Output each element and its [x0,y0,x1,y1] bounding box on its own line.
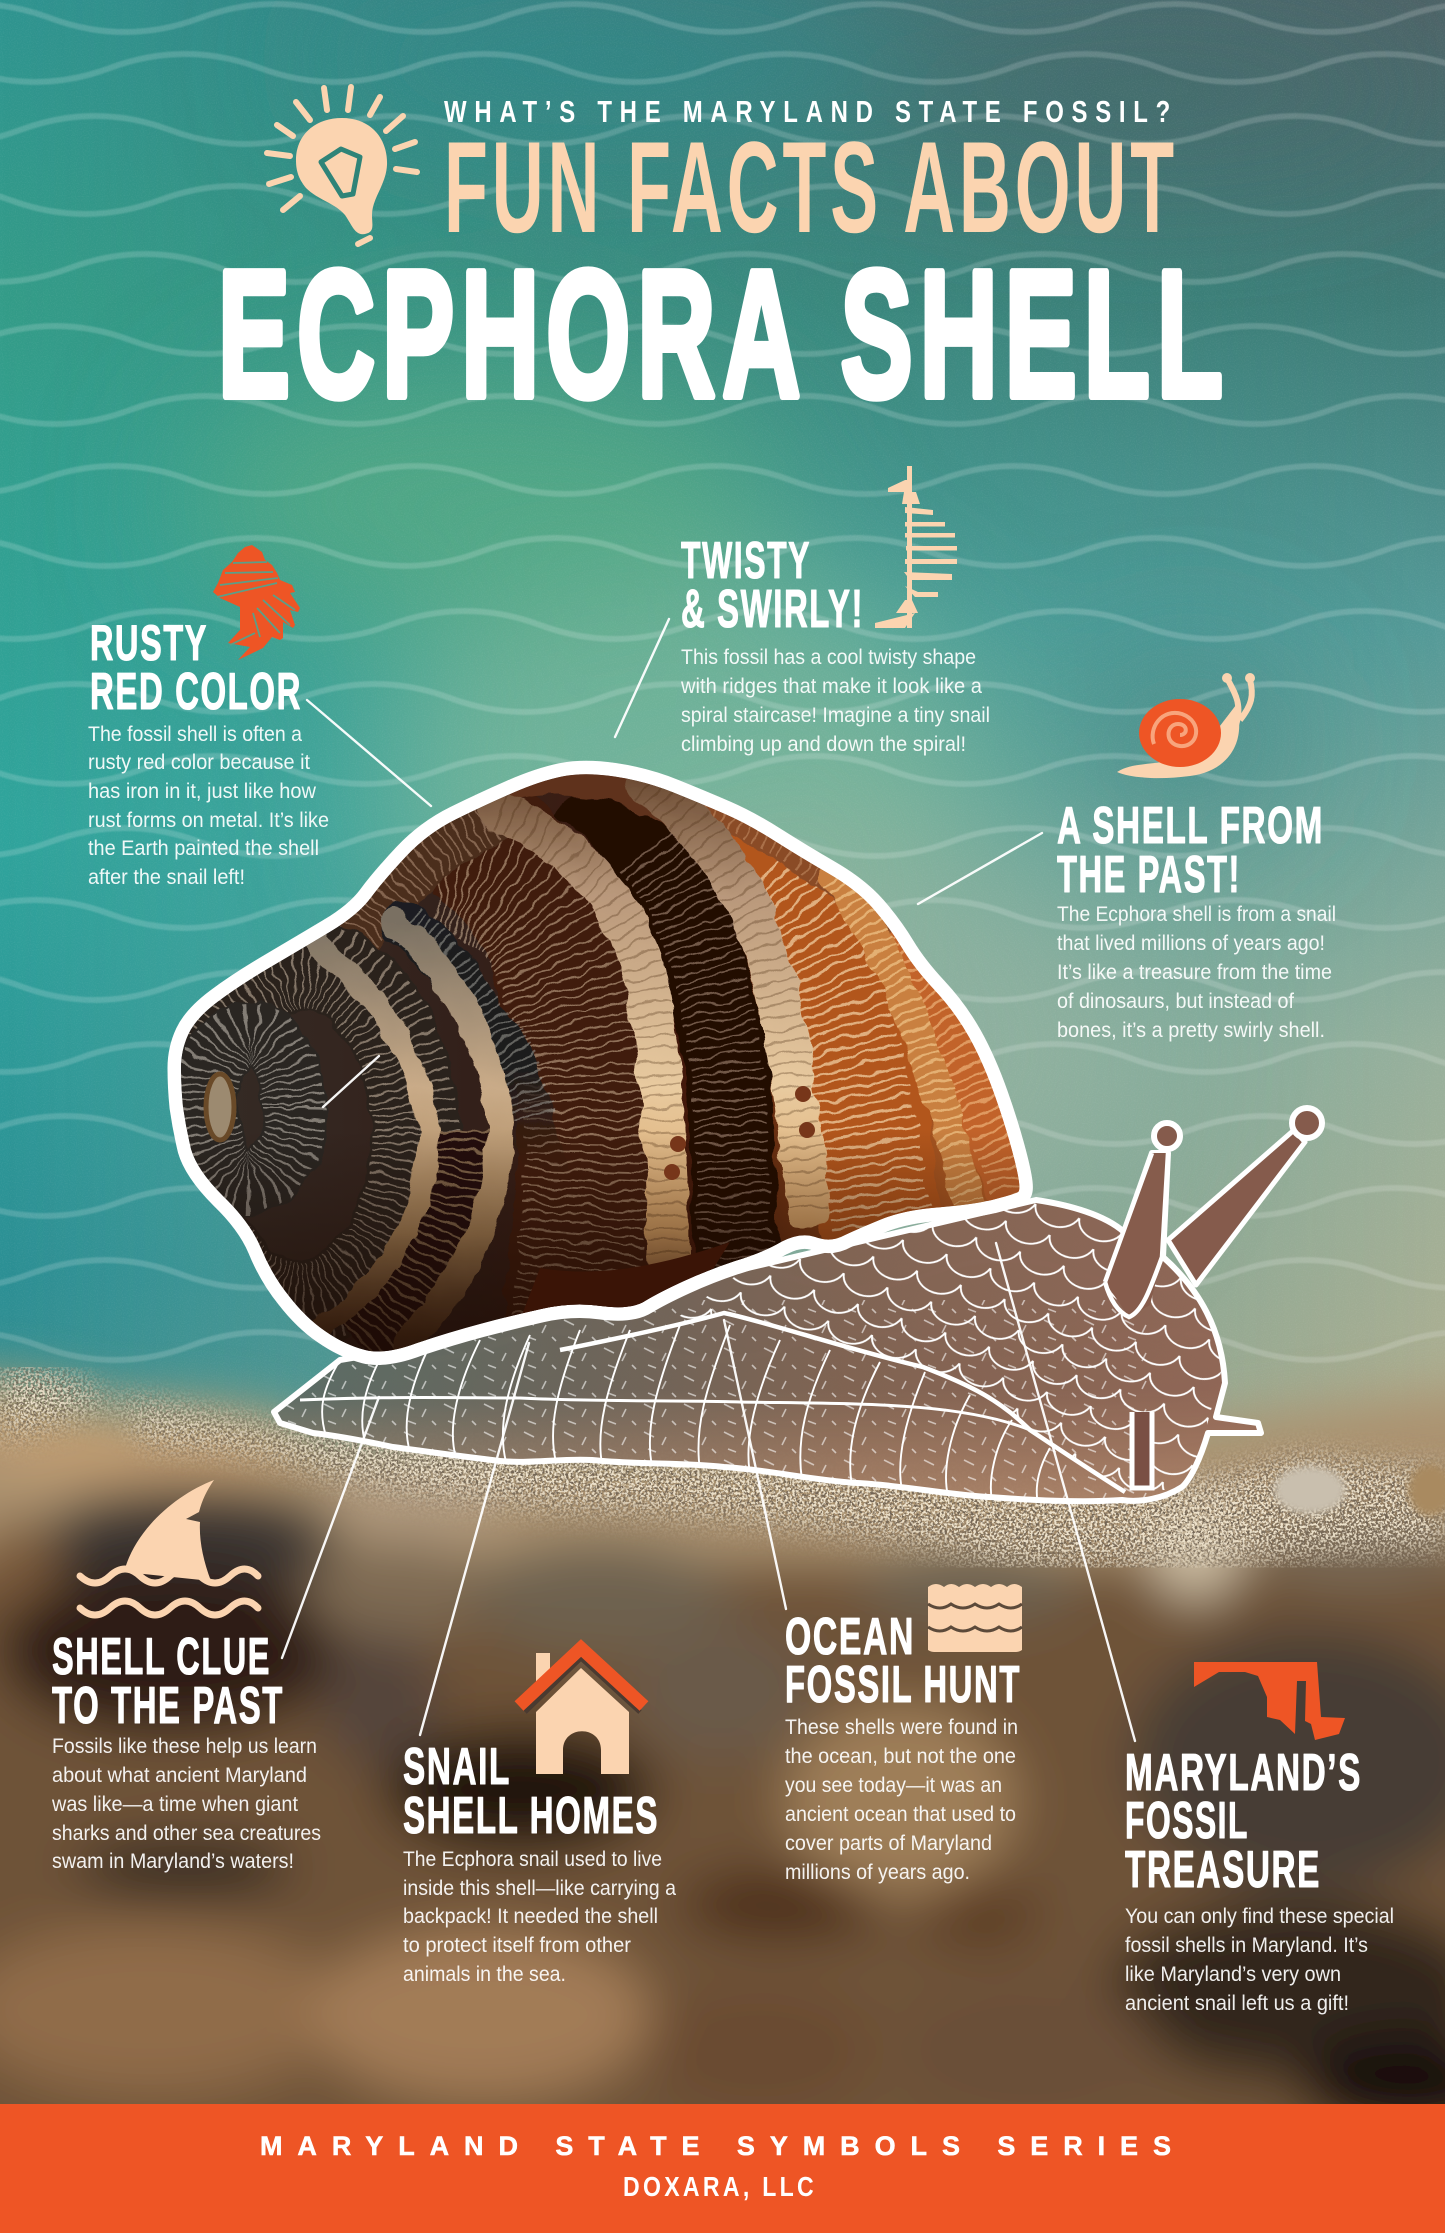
pebbles [1274,1464,1445,1516]
body text: with ridges that make it look like a [680,675,982,698]
lower shadow [170,1130,1030,1360]
body text: to protect itself from other [403,1934,631,1957]
body text: It’s like a treasure from the time [1057,961,1332,984]
icon: small snail [1117,673,1255,778]
body text: the Earth painted the shell [88,837,319,860]
body text: bones, it’s a pretty swirly shell. [1057,1019,1325,1042]
callout: shell clue to the past [51,1480,321,1873]
icon: light bulb [267,87,417,244]
heading: SHELL HOMES [403,1787,659,1845]
body text: Fossils like these help us learn [52,1735,317,1758]
body text: was like—a time when giant [51,1793,298,1816]
body text [785,1716,1018,1884]
heading: FOSSIL [1125,1792,1249,1850]
body text: that lived millions of years ago! [1057,932,1325,955]
heading: OCEAN [785,1608,915,1666]
foot mid line [300,1398,1030,1430]
callout: ocean fossil hunt [785,1584,1022,1884]
callout: twisty and swirly [680,466,990,756]
publisher: DOXARA, LLC [623,2171,817,2202]
body text [680,646,990,756]
decorative waves [0,4,1445,1360]
heading: TWISTY [681,532,811,590]
heading [403,1738,659,1845]
icon: spiral staircase [875,466,957,628]
callout: rusty red color [88,545,329,889]
shell white sticker border [181,774,1019,1351]
body text: fossil shells in Maryland. It’s [1125,1934,1368,1957]
heading: TO THE PAST [52,1677,284,1735]
heading [90,615,302,721]
large striped whorl between ribs 2 and 3 [460,830,587,1340]
body text: animals in the sea. [403,1963,566,1986]
body text [1057,903,1336,1042]
body text [403,1848,676,1986]
shell body [170,773,1040,1360]
body text: swam in Maryland’s waters! [52,1850,294,1873]
heading [1125,1744,1362,1899]
body text: cover parts of Maryland [785,1832,992,1855]
rib pits [664,1086,815,1180]
heading: SNAIL [403,1738,511,1796]
body text: ancient snail left us a gift! [1125,1992,1349,2015]
aperture [520,1242,730,1320]
heading: RUSTY [90,615,208,671]
dark whorl between ribs 3 and 4 [580,780,735,1320]
leader lines [282,619,1135,1741]
mouth stem [1132,1412,1152,1488]
heading: & SWIRLY! [681,579,864,639]
heading: TREASURE [1125,1841,1321,1899]
heading: FOSSIL HUNT [785,1656,1021,1714]
icon: stacked waves [928,1584,1022,1652]
heading [681,532,864,639]
body text: the ocean, but not the one [785,1745,1016,1768]
body text: of dinosaurs, but instead of [1057,990,1294,1013]
body text: inside this shell—like carrying a [403,1877,676,1900]
body text [51,1735,321,1873]
body text: after the snail left! [88,866,245,889]
blurred sand foreground [0,1372,1445,2170]
body text: The Ecphora shell is from a snail [1057,903,1336,926]
series label: MARYLAND STATE SYMBOLS SERIES [260,2131,1171,2161]
snail body illustration [270,1108,1322,1510]
callout: a shell from the past [1057,673,1336,1042]
heading [52,1628,284,1735]
callout: snail shell homes [403,1648,676,1986]
body text: has iron in it, just like how [88,780,317,803]
heading [785,1608,1021,1714]
body text: rust forms on metal. It’s like [88,809,329,832]
body outline [274,1153,1261,1501]
body text: climbing up and down the spiral! [681,733,966,756]
body text: This fossil has a cool twisty shape [681,646,976,669]
body text: you see today—it was an [785,1774,1002,1797]
grainy sand texture [0,1367,1445,1567]
body silhouette [274,1153,1261,1501]
heading: RED COLOR [90,663,302,721]
dark teal-black band [405,925,545,1170]
callout: maryland's fossil treasure [1125,1662,1394,2015]
icon: Maryland state map [1194,1662,1345,1740]
title block [218,87,1230,435]
middle whorl stripes [185,965,415,1305]
body text [1125,1905,1394,2015]
body text: spiral staircase! Imagine a tiny snail [681,704,990,727]
apex disc [206,1074,234,1140]
heading: SHELL CLUE [52,1628,271,1686]
body text: You can only find these special [1125,1905,1394,1928]
icon: orange conch shell [213,545,300,660]
body text: about what ancient Maryland [52,1764,307,1787]
mantle dividing line [560,1313,1125,1492]
grain overlay [0,0,1445,1420]
ribs [318,945,428,1328]
apex whorl [205,1034,295,1182]
footer band [0,2104,1445,2233]
body text: rusty red color because it [88,751,310,774]
body text: sharks and other sea creatures [52,1822,321,1845]
icon: shark fin over waves [80,1480,258,1615]
kicker text: WHAT’S THE MARYLAND STATE FOSSIL? [444,94,1178,129]
whorl between ribs 4 and 5 [740,800,885,1260]
back eye stalk [1168,1108,1322,1285]
body text: ancient ocean that used to [785,1803,1016,1826]
front eye stalk [1105,1123,1180,1317]
heading [1057,797,1324,904]
icon: house [519,1648,644,1774]
body text: backpack! It needed the shell [403,1905,658,1928]
body text: These shells were found in [785,1716,1018,1739]
body text: millions of years ago. [785,1861,970,1884]
body scales and ridges [286,1203,1221,1498]
heading: THE PAST! [1057,846,1241,904]
body text: The fossil shell is often a [88,723,302,746]
body text: The Ecphora snail used to live [403,1848,662,1871]
body text [88,723,329,889]
outer orange band [890,932,1020,1201]
fossil shell illustration [170,773,1040,1360]
body text: like Maryland’s very own [1125,1963,1341,1986]
